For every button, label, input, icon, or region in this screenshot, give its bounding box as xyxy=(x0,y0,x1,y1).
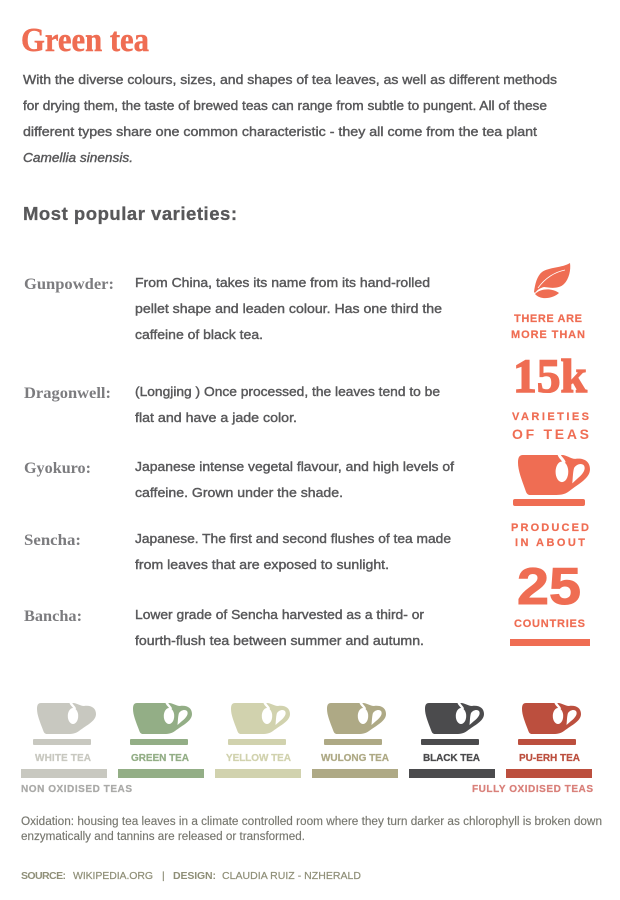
stat text: varieties of teas: VARIETIES xyxy=(512,411,589,423)
stat text: there are more than xyxy=(511,313,585,341)
icon: tea leaf xyxy=(534,263,570,298)
oxidation note: Oxidation: housing tea leaves in a climate controlled room where they turn darker as chlorophyll is broken down xyxy=(21,816,602,828)
tea type: green xyxy=(118,702,204,778)
stat text: produced in about: IN ABOUT xyxy=(515,537,585,549)
stat text: varieties of teas: OF TEAS xyxy=(512,426,589,442)
intro paragraph xyxy=(23,72,558,165)
variety: Gunpowder xyxy=(24,275,442,342)
source and design credit: WIKIPEDIA.ORG xyxy=(73,870,153,882)
stat text: produced in about: PRODUCED xyxy=(511,522,589,534)
variety: Gunpowder: From China, takes its name from its hand-rolled xyxy=(135,275,430,290)
title: Green tea xyxy=(21,22,149,59)
tea type: pu-erh: PU-ERH TEA xyxy=(519,753,580,764)
variety: Sencha xyxy=(24,531,451,572)
source and design credit: SOURCE: xyxy=(21,870,66,882)
tea type: wulong: WULONG TEA xyxy=(321,753,389,764)
source and design credit: | xyxy=(162,870,165,882)
scale label: non oxidised teas: NON OXIDISED TEAS xyxy=(21,784,132,795)
variety: Bancha xyxy=(24,607,425,648)
source and design credit xyxy=(21,870,361,882)
stat text: varieties of teas xyxy=(512,411,589,442)
variety: Dragonwell: Dragonwell: xyxy=(24,385,111,402)
stat text: countries: COUNTRIES xyxy=(514,618,585,630)
tea type: yellow xyxy=(215,702,301,778)
variety: Gyokuro: Japanese intense vegetal flavour, and high levels of xyxy=(135,459,454,474)
stat number: 15k: 15k xyxy=(513,350,587,403)
scale label: fully oxidised teas: FULLY OXIDISED TEAS xyxy=(472,784,593,795)
heading: most popular varieties: Most popular varieties: xyxy=(23,203,237,224)
stat text: produced in about xyxy=(511,522,589,549)
stat number: 25: 25 xyxy=(517,558,581,616)
tea type: green: GREEN TEA xyxy=(131,753,189,764)
variety: Sencha: from leaves that are exposed to sunlight. xyxy=(135,557,389,572)
oxidation note: enzymatically and tannins are released or transformed. xyxy=(21,831,305,843)
intro paragraph: different types share one common characteristic - they all come from the tea plant xyxy=(23,124,537,139)
variety: Dragonwell xyxy=(24,384,440,425)
source and design credit: CLAUDIA RUIZ - NZHERALD xyxy=(222,870,361,882)
tea type: black: BLACK TEA xyxy=(423,753,480,764)
variety: Gyokuro: caffeine. Grown under the shade. xyxy=(135,485,343,500)
tea type: pu-erh xyxy=(506,702,592,778)
intro paragraph: for drying them, the taste of brewed teas can range from subtle to pungent. All of these xyxy=(23,98,547,113)
icon: large tea cup xyxy=(513,454,590,506)
variety: Gunpowder: pellet shape and leaden colour. Has one third the xyxy=(135,301,442,316)
stat text: there are more than: MORE THAN xyxy=(511,329,585,341)
variety: Dragonwell: flat and have a jade color. xyxy=(135,410,297,425)
intro paragraph: With the diverse colours, sizes, and shapes of tea leaves, as well as different methods xyxy=(23,72,558,87)
tea type: white xyxy=(21,702,107,778)
variety: Gyokuro xyxy=(24,459,454,500)
variety: Gyokuro: Gyokuro: xyxy=(24,460,91,477)
tea type: yellow: YELLOW TEA xyxy=(226,753,291,764)
variety: Dragonwell: (Longjing ) Once processed, the leaves tend to be xyxy=(135,384,440,399)
variety: Sencha: Sencha: xyxy=(24,532,81,549)
oxidation note xyxy=(21,816,602,843)
variety: Bancha: Bancha: xyxy=(24,608,82,625)
tea type: wulong xyxy=(312,702,398,778)
source and design credit: DESIGN: xyxy=(173,870,216,882)
tea type: black xyxy=(409,702,495,778)
variety: Bancha: Lower grade of Sencha harvested as a third- or xyxy=(135,607,425,622)
intro paragraph: Camellia sinensis. xyxy=(23,150,133,165)
variety: Bancha: fourth-flush tea between summer and autumn. xyxy=(135,633,424,648)
variety: Gunpowder: caffeine of black tea. xyxy=(135,327,263,342)
variety: Gunpowder: Gunpowder: xyxy=(24,276,114,293)
variety: Sencha: Japanese. The first and second flushes of tea made xyxy=(135,531,451,546)
stat text: there are more than: THERE ARE xyxy=(514,313,582,325)
tea type: white: WHITE TEA xyxy=(35,753,91,764)
stat underline bar xyxy=(510,639,590,646)
